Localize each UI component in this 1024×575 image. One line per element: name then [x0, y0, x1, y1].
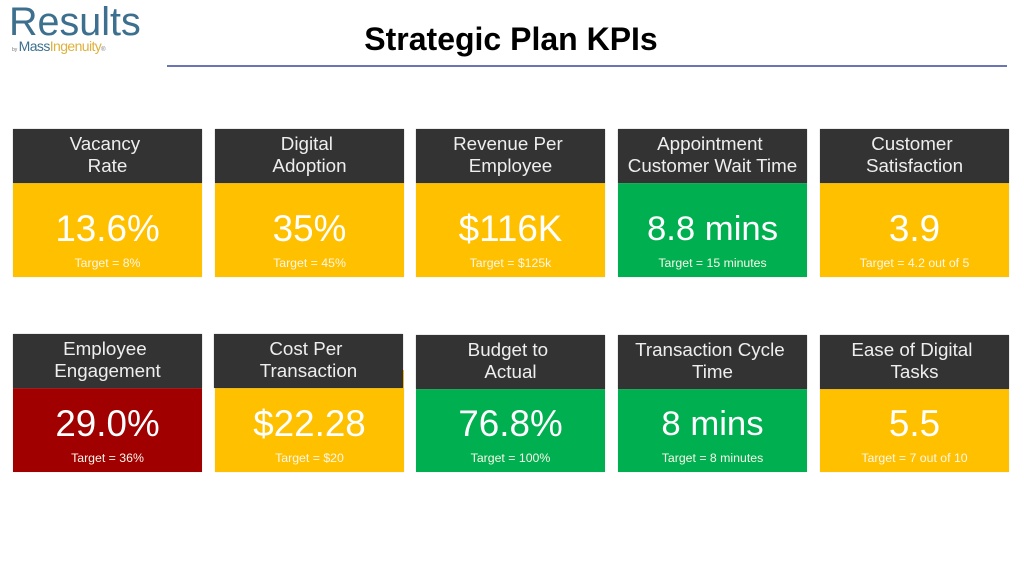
status block: [618, 389, 807, 472]
heading: [13, 334, 202, 388]
title: Strategic Plan KPIs: [364, 21, 658, 57]
status block: Target = 7 out of 10: [861, 451, 968, 465]
panel: Digital Adoption: [214, 128, 404, 278]
status block: Target = 100%: [471, 451, 550, 465]
logo wordmark: Results: [9, 0, 141, 44]
heading: [618, 335, 807, 389]
heading: [416, 335, 605, 389]
heading: Ease of Digital: [851, 339, 972, 360]
status block: Target = 4.2 out of 5: [860, 256, 969, 270]
panel: Transaction Cycle Time: [618, 334, 808, 472]
status block: [13, 388, 202, 472]
heading: [820, 335, 1009, 389]
heading: Adoption: [272, 155, 347, 176]
heading: Cost Per: [269, 338, 342, 359]
panel: Employee Engagement: [12, 334, 202, 472]
heading: Employee: [469, 155, 552, 176]
heading: Rate: [88, 155, 127, 176]
status block: 5.5: [889, 403, 940, 444]
status block: [13, 183, 202, 277]
status block: 76.8%: [458, 403, 563, 444]
status block: $22.28: [253, 403, 366, 444]
heading: Tasks: [890, 361, 938, 382]
logo byline: by MassIngenuity®: [12, 38, 105, 54]
status block: Target = 8%: [75, 256, 140, 270]
heading: Vacancy: [70, 133, 140, 154]
heading: [13, 129, 202, 183]
heading: Customer Wait Time: [628, 155, 797, 176]
logo: Results by MassIngenuity: [9, 0, 141, 54]
heading: Revenue Per: [453, 133, 563, 154]
status block: Target = $125k: [470, 256, 551, 270]
status block: Target = $20: [275, 451, 344, 465]
status block: [820, 389, 1009, 472]
status block: 35%: [273, 208, 346, 249]
status block: Target = 36%: [71, 451, 144, 465]
heading: Appointment: [657, 133, 763, 154]
heading: Satisfaction: [866, 155, 963, 176]
status block: [416, 389, 605, 472]
heading: Employee: [63, 338, 147, 359]
panel: Appointment Customer Wait Time: [618, 128, 808, 278]
panel: Revenue Per Employee: [416, 128, 606, 278]
panel: Vacancy Rate: [12, 128, 202, 278]
panel: Ease of Digital Tasks: [820, 334, 1010, 472]
status block: 8.8 mins: [647, 210, 778, 248]
heading: Transaction: [260, 360, 357, 381]
heading: [820, 129, 1009, 183]
status block: $116K: [459, 208, 562, 249]
status block: Target = 15 minutes: [658, 256, 767, 270]
status block: 13.6%: [55, 208, 160, 249]
status block: Target = 8 minutes: [662, 451, 763, 465]
panel: Cost Per Transaction: [214, 334, 404, 472]
status block: Target = 45%: [273, 256, 346, 270]
status block: [215, 183, 404, 277]
heading: [214, 334, 403, 388]
title rule: [167, 65, 1007, 67]
status block: 29.0%: [55, 403, 160, 444]
heading: Engagement: [54, 360, 161, 381]
heading: Customer: [871, 133, 953, 154]
heading: Transaction Cycle: [635, 339, 785, 360]
heading: [215, 129, 404, 183]
panel: Budget to Actual: [416, 334, 606, 472]
heading: Time: [692, 361, 733, 382]
status block: [215, 388, 404, 472]
status block: 3.9: [889, 208, 940, 249]
heading: Actual: [484, 361, 537, 382]
status block: 8 mins: [661, 405, 764, 443]
heading: Budget to: [468, 339, 548, 360]
heading: [618, 129, 807, 183]
heading: [416, 129, 605, 183]
heading: Digital: [281, 133, 333, 154]
panel: Customer Satisfaction: [820, 128, 1010, 278]
status block: [618, 183, 807, 277]
status block: [820, 183, 1009, 277]
status block: [416, 183, 605, 277]
